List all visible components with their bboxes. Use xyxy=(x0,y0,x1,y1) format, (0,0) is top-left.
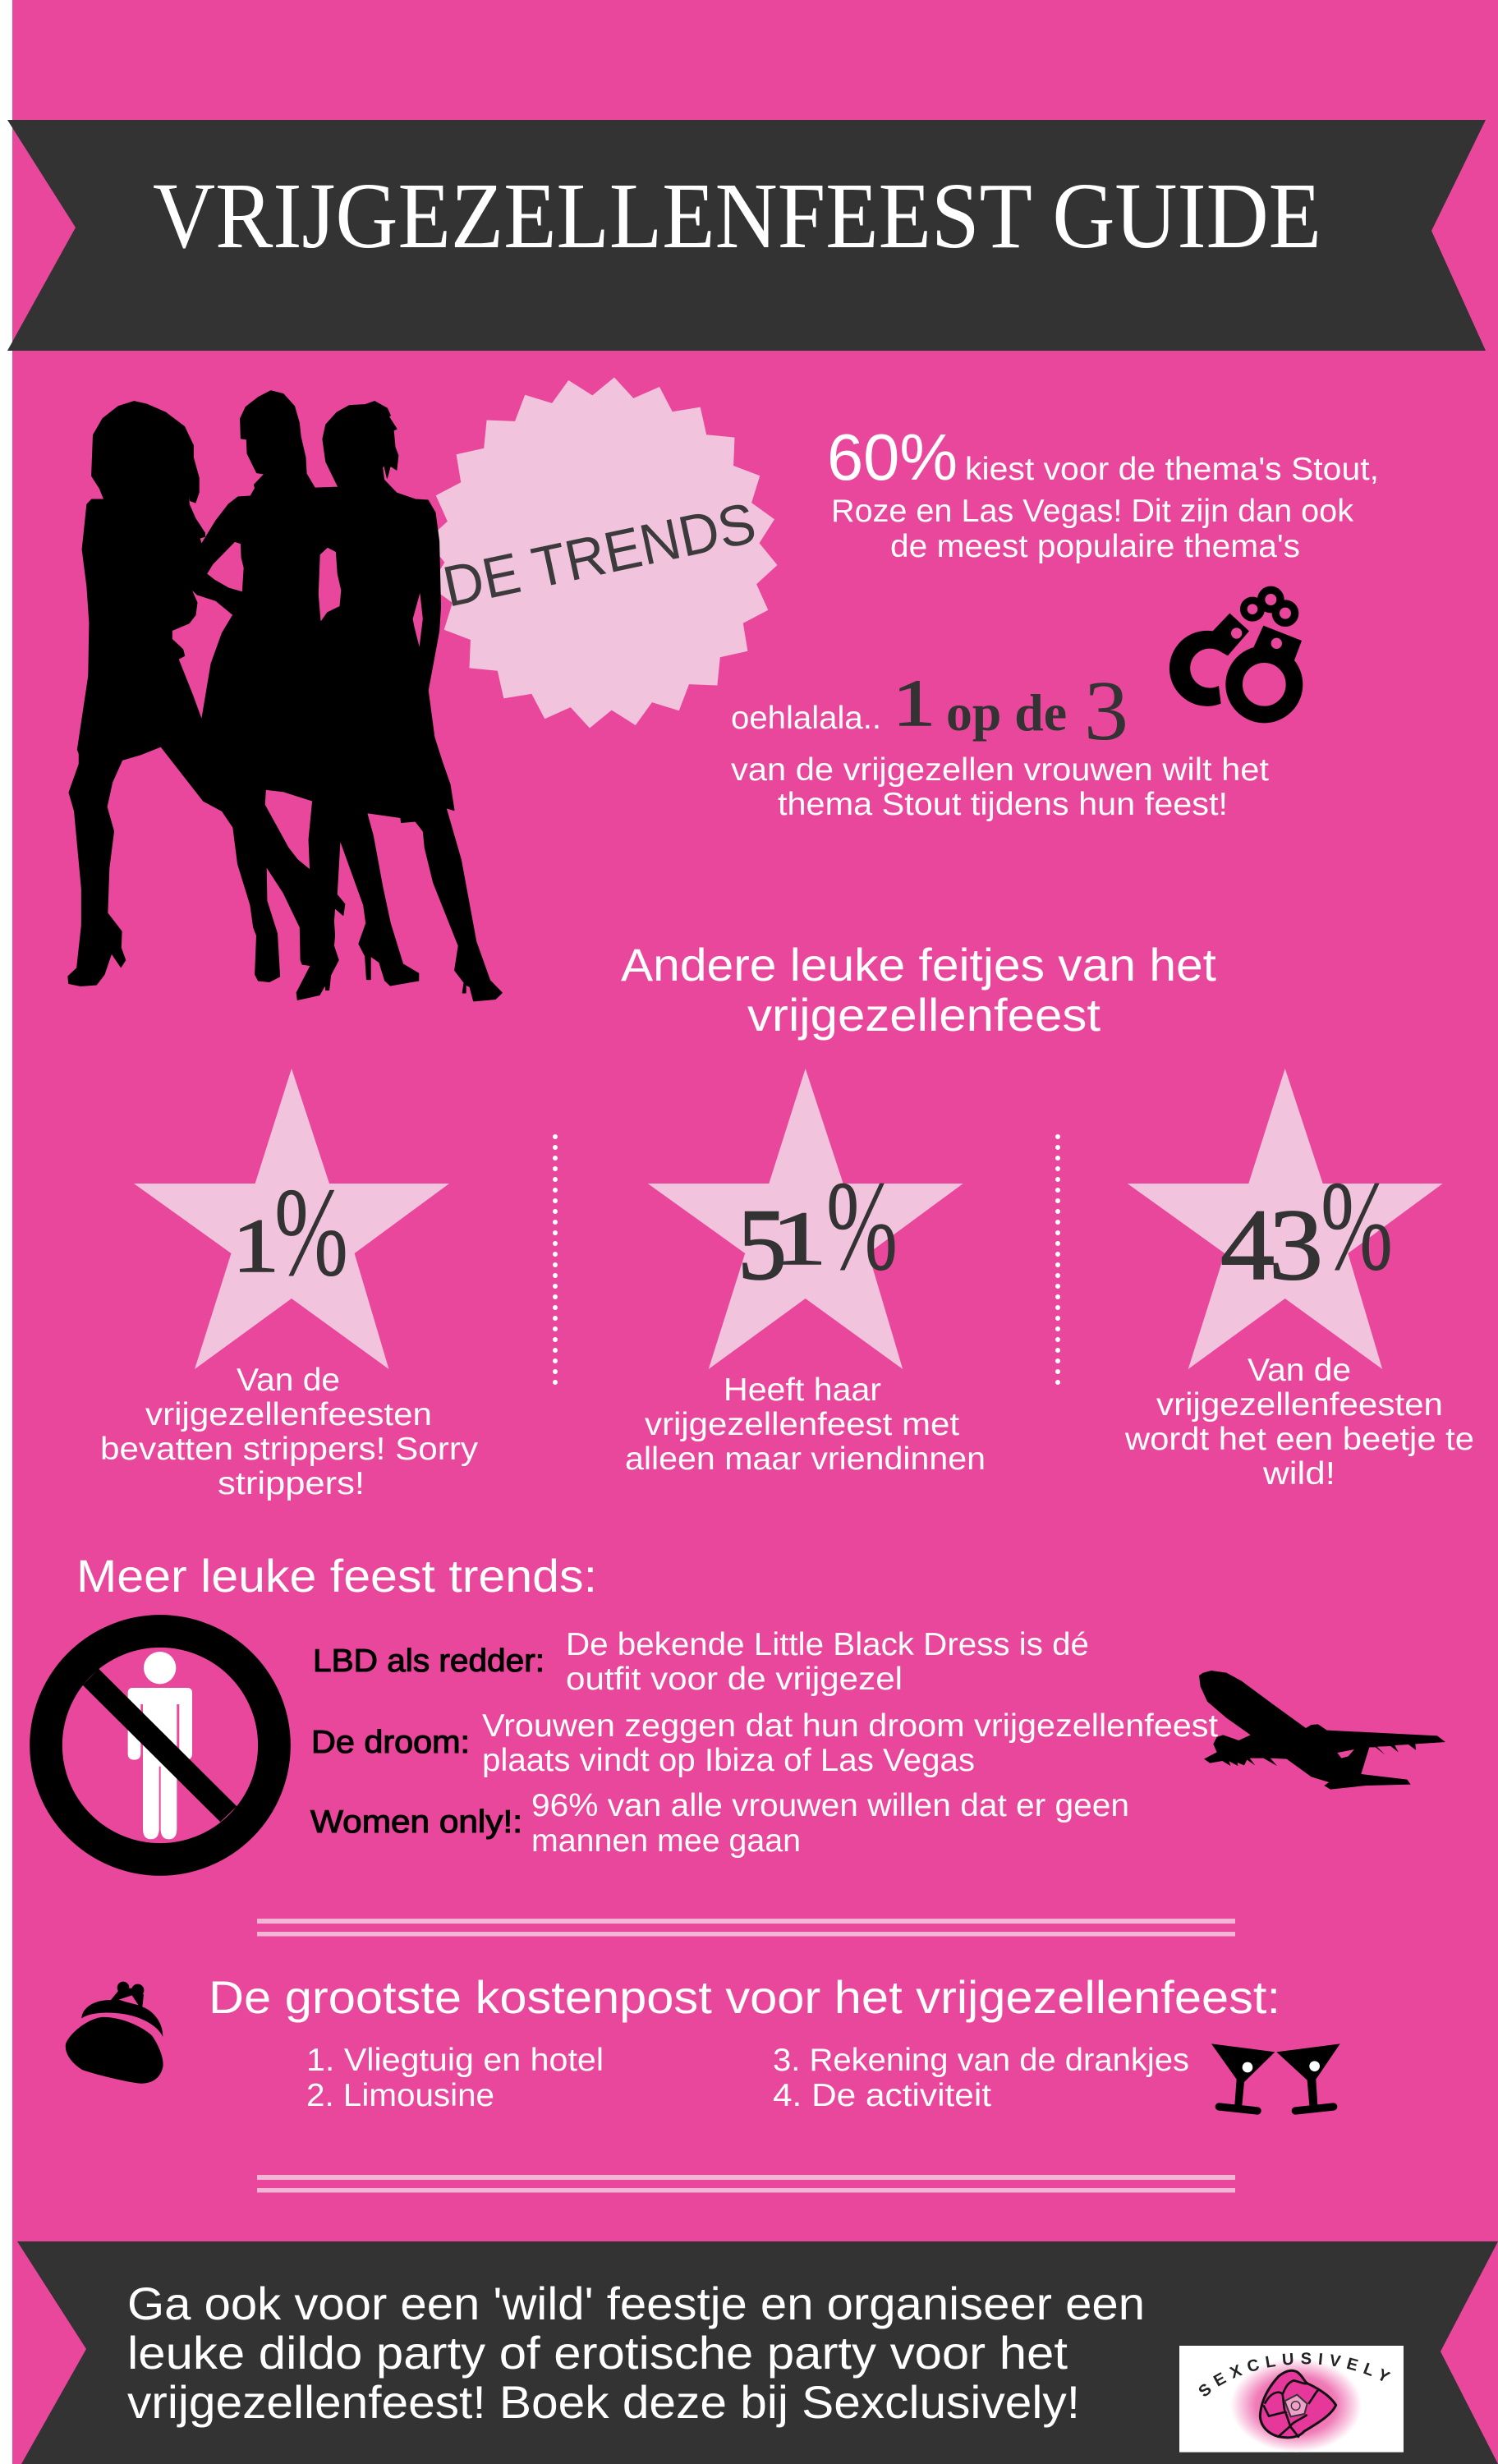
icon: airplane xyxy=(1199,1671,1445,1790)
call to action text: vrijgezellenfeest! Boek deze bij Sexclusively! xyxy=(127,2376,1080,2428)
icon: handcuffs xyxy=(1169,590,1302,715)
trend: lbd als redder: LBD als redder: xyxy=(313,1643,545,1679)
call to action text: Ga ook voor een 'wild' feestje en organiseer een xyxy=(127,2278,1145,2329)
trend: de droom: Vrouwen zeggen dat hun droom vrijgezellenfeest xyxy=(482,1708,1218,1744)
fact: 51 percent star xyxy=(625,1069,986,1477)
trend: de droom: plaats vindt op Ibiza of Las Vegas xyxy=(482,1743,975,1778)
stat: 60 percent xyxy=(827,421,1379,564)
stat: 1 op de 3: 3 xyxy=(1084,664,1128,758)
list: cost items: 4. De activiteit xyxy=(773,2078,991,2113)
divider: double line upper xyxy=(257,1919,1235,1937)
fact: 51 percent star: Heeft haar xyxy=(724,1372,881,1408)
badge: de trends xyxy=(427,378,777,728)
stat: 1 op de 3 xyxy=(731,664,1269,822)
fact: 43 percent star: 3 xyxy=(1269,1188,1323,1301)
fact: 43 percent star: 4 xyxy=(1220,1188,1275,1301)
heading: meer leuke feest trends: Meer leuke feest trends: xyxy=(76,1550,597,1602)
divider: dotted right xyxy=(1055,1137,1060,1388)
stat: 1 op de 3: 1 xyxy=(893,668,935,740)
fact: 43 percent star: % xyxy=(1321,1154,1393,1297)
fact: 43 percent star: vrijgezellenfeesten xyxy=(1156,1387,1443,1423)
fact: 43 percent star: wordt het een beetje te xyxy=(1124,1422,1474,1457)
trend: de droom: De droom: xyxy=(311,1725,470,1760)
heading: andere leuke feitjes: Andere leuke feitjes van het xyxy=(621,939,1216,991)
silhouette: three women xyxy=(68,391,502,1001)
stat: 60 percent: de meest populaire thema's xyxy=(890,529,1300,564)
fact: 51 percent star: vrijgezellenfeest met xyxy=(645,1407,959,1442)
list: cost items: 1. Vliegtuig en hotel xyxy=(306,2043,604,2078)
stat: 1 op de 3: op de xyxy=(946,683,1067,742)
fact: 1 percent star: 1 xyxy=(232,1204,279,1289)
heading: andere leuke feitjes: vrijgezellenfeest xyxy=(747,989,1101,1041)
title: VRIJGEZELLENFEEST GUIDE xyxy=(153,163,1321,268)
top banner with title xyxy=(7,120,1486,351)
logo: sexclusively: SEXCLUSIVELY xyxy=(1199,2352,1391,2397)
trend: women only: 96% van alle vrouwen willen dat er geen xyxy=(531,1788,1129,1823)
call to action text: leuke dildo party of erotische party voor het xyxy=(127,2327,1068,2379)
trend: lbd als redder xyxy=(313,1627,1089,1697)
trend: de droom xyxy=(311,1708,1218,1778)
heading: andere leuke feitjes xyxy=(621,939,1216,1041)
stat: 1 op de 3: van de vrijgezellen vrouwen wilt het xyxy=(731,752,1269,788)
logo: sexclusively xyxy=(1179,2346,1404,2453)
stat: 60 percent: 60% xyxy=(827,421,958,494)
divider: double line lower xyxy=(257,2175,1235,2193)
fact: 1 percent star: bevatten strippers! Sorry xyxy=(100,1432,479,1467)
heading: grootste kostenpost: De grootste kostenpost voor het vrijgezellenfeest: xyxy=(209,1971,1280,2023)
fact: 1 percent star: Van de xyxy=(237,1363,340,1398)
trend: women only xyxy=(310,1788,1129,1859)
icon: purse xyxy=(66,1982,163,2084)
badge: de trends: DE TRENDS xyxy=(438,490,761,619)
stat: 60 percent: kiest voor de thema's Stout, xyxy=(965,452,1379,487)
stat: 1 op de 3: thema Stout tijdens hun feest! xyxy=(778,787,1228,822)
fact: 51 percent star: 5 xyxy=(738,1188,787,1301)
fact: 1 percent star: strippers! xyxy=(218,1466,365,1501)
bottom banner with call to action xyxy=(17,2241,1498,2464)
divider: dotted left xyxy=(553,1137,558,1388)
fact: 43 percent star: Van de xyxy=(1248,1353,1351,1388)
fact: 1 percent star: vrijgezellenfeesten xyxy=(145,1397,432,1432)
list: cost items: 2. Limousine xyxy=(306,2078,494,2113)
trend: lbd als redder: De bekende Little Black Dress is dé xyxy=(566,1627,1089,1662)
list: cost items: 3. Rekening van de drankjes xyxy=(773,2043,1189,2078)
fact: 43 percent star: wild! xyxy=(1262,1456,1335,1492)
icon: no men sign xyxy=(46,1631,274,1859)
call to action text xyxy=(127,2278,1145,2428)
trend: lbd als redder: outfit voor de vrijgezel xyxy=(566,1662,903,1697)
trend: women only: mannen mee gaan xyxy=(531,1823,801,1859)
fact: 51 percent star: % xyxy=(826,1154,898,1297)
fact: 51 percent star: alleen maar vriendinnen xyxy=(625,1441,986,1477)
fact: 1 percent star: % xyxy=(274,1161,348,1303)
stat: 60 percent: Roze en Las Vegas! Dit zijn dan ook xyxy=(831,494,1353,529)
fact: 1 percent star xyxy=(100,1069,479,1501)
fact: 51 percent star: 1 xyxy=(771,1197,827,1281)
trend: women only: Women only!: xyxy=(310,1804,522,1840)
list: cost items xyxy=(306,2043,1189,2113)
icon: cocktail glasses xyxy=(1211,2043,1340,2111)
fact: 43 percent star xyxy=(1124,1069,1474,1492)
stat: 1 op de 3: oehlalala.. xyxy=(731,701,881,736)
